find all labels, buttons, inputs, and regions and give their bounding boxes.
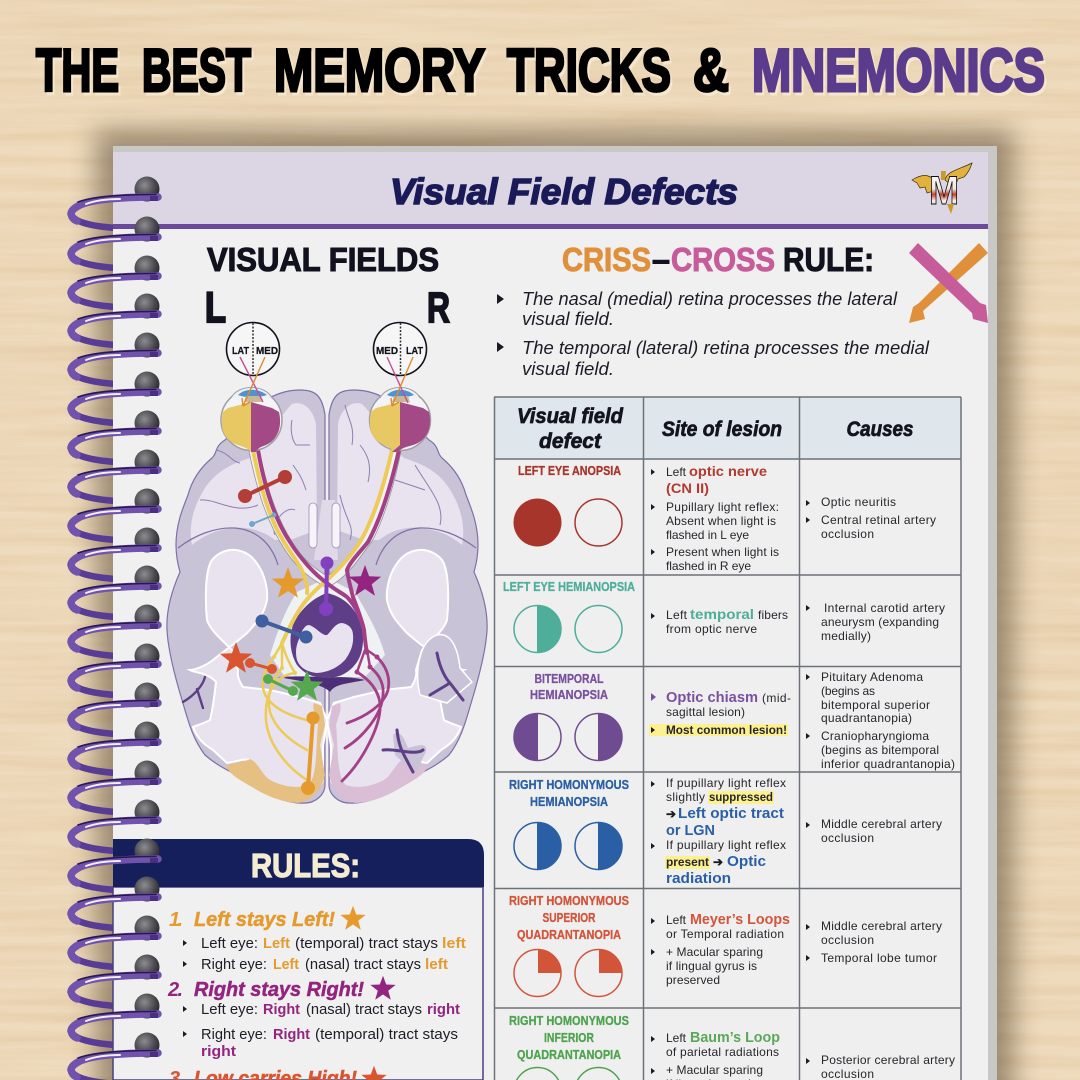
criss-cross heading: CRISS [562,241,651,278]
rule 1: (temporal) tract stays [295,935,438,952]
row: bitemporal hemianopsia: inferior quadrantanopia) [821,757,955,771]
row: right homonymous hemianopsia: If pupillary light reflex [666,776,786,790]
lesion marker: optic nerve [238,470,292,502]
title [36,37,1045,104]
rule 1: Left eye: [201,935,258,952]
logo: winged M: M [929,169,959,213]
table header: Site of lesion [662,418,782,441]
row: right homonymous inferior quadrantanopia [509,1013,955,1080]
eye: left [221,388,282,452]
title: MEMORY [274,37,485,104]
right visual field circle: LAT [406,346,423,357]
row: right homonymous hemianopsia: Middle cerebral artery [821,817,942,831]
row: left eye hemianopsia: from optic nerve [666,622,757,636]
page header band [113,152,988,229]
star: green [291,670,323,701]
rule 2: Right eye: [201,1026,267,1043]
rule 1: Left [263,935,290,952]
row: left eye hemianopsia: medially) [821,629,871,643]
title: BEST [142,37,251,104]
row: bitemporal hemianopsia: HEMIANOPSIA [530,687,609,702]
lesion marker: Baum's loop [264,674,298,696]
rule 2: (nasal) tract stays [306,1001,422,1018]
row: right homonymous hemianopsia: occlusion [821,831,874,845]
rule text: nasal retina: visual field. [522,308,614,329]
rule 2: right [427,1001,460,1018]
rule 1: Right eye: [201,956,267,973]
row: left eye anopsia: occlusion [821,527,874,541]
lesion marker: visual cortex [302,712,319,794]
left hemisphere [167,390,327,803]
row: right homonymous hemianopsia: If pupillary light reflex [666,838,786,852]
row: right homonymous superior quadrantanopia: RIGHT HOMONYMOUS [509,893,629,908]
lesion marker: optic tract [256,615,312,643]
row: bitemporal hemianopsia [514,670,955,771]
table [494,397,961,1080]
row: right homonymous superior quadrantanopia: or Temporal radiation [666,927,784,941]
lesion marker: chiasm [320,557,333,616]
label: L: L [205,284,226,332]
row: right homonymous superior quadrantanopia: Middle cerebral artery [821,919,942,933]
row: bitemporal hemianopsia: quadrantanopia) [821,711,912,725]
row: bitemporal hemianopsia: Optic chiasm [666,690,758,706]
row: left eye anopsia: Present when light is [666,545,779,559]
row: left eye anopsia: flashed in R eye [666,559,751,573]
left visual field circle: MED [256,346,278,357]
criss-cross heading: CROSS [671,241,775,278]
row: right homonymous superior quadrantanopia: Meyer’s Loops [690,912,790,928]
lesion marker: Meyer's loop [246,658,276,674]
row: left eye anopsia: (CN II) [666,480,709,496]
right hemisphere [327,390,487,803]
row: right homonymous superior quadrantanopia: QUADRANTANOPIA [517,927,622,942]
rule text: temporal retina [497,337,930,379]
rule 2: right [201,1043,236,1060]
star: red [220,642,252,673]
row: left eye anopsia [514,463,936,573]
eye: right [370,388,430,452]
rule 1: left [425,956,448,973]
heading: visual fields: VISUAL FIELDS [207,241,439,278]
row: right homonymous inferior quadrantanopia: INFERIOR [544,1030,594,1045]
row: left eye anopsia: optic nerve [689,463,767,479]
rule 1: (nasal) tract stays [305,956,421,973]
row: right homonymous inferior quadrantanopia: QUADRANTANOPIA [517,1047,622,1062]
pale band around tracts [270,578,385,677]
row: left eye hemianopsia [503,579,945,653]
row: right homonymous superior quadrantanopia: Left [666,913,687,927]
row: right homonymous hemianopsia: ➔ [666,807,676,821]
row: right homonymous inferior quadrantanopia: Posterior cerebral artery [821,1053,955,1067]
label: R: R [427,284,450,332]
row: left eye anopsia: Central retinal artery [821,513,936,527]
row: right homonymous hemianopsia [509,776,942,887]
visual field circles [514,498,622,546]
row: right homonymous superior quadrantanopia: occlusion [821,933,874,947]
visual field circles [514,713,622,761]
row: right homonymous superior quadrantanopia: if lingual gyrus is [666,959,757,973]
rule 1: Left [273,956,299,973]
row: left eye hemianopsia: LEFT EYE HEMIANOPSIA [503,579,636,594]
right visual field circle [374,322,426,406]
row: right homonymous hemianopsia: RIGHT HOMONYMOUS [509,777,629,792]
row: bitemporal hemianopsia: (begins as [821,684,875,698]
row: left eye hemianopsia: fibers [758,608,788,622]
star: magenta [349,565,381,596]
visual field circles [514,949,622,996]
row: right homonymous hemianopsia: present [666,855,709,869]
rule 1: left [442,935,466,952]
page heading: Visual Field Defects [390,171,738,212]
row: right homonymous hemianopsia: suppressed [709,790,773,804]
rule 2: Right [263,1001,300,1018]
row: bitemporal hemianopsia: BITEMPORAL [534,671,604,686]
row: right homonymous hemianopsia: Optic [727,854,766,870]
rule 2: Right stays Right! [194,979,364,1001]
rule 1 [169,906,466,973]
right visual field circle: MED [376,346,398,357]
row: right homonymous hemianopsia: slightly [666,790,705,804]
rule 2: 2. [167,979,183,1001]
spiral back coils [71,214,116,1080]
rule 3 [169,1066,387,1080]
criss-cross arrows [909,243,988,323]
rules header [113,839,484,887]
row: right homonymous superior quadrantanopia: + Macular sparing [666,945,763,959]
rule 2: (temporal) tract stays [315,1026,458,1043]
row: right homonymous inferior quadrantanopia: Left [666,1031,687,1045]
row: right homonymous superior quadrantanopia [509,893,942,996]
row: right homonymous inferior quadrantanopia: of parietal radiations [666,1045,779,1059]
criss-cross heading: RULE: [783,241,874,278]
row: right homonymous superior quadrantanopia: SUPERIOR [542,910,596,925]
rule text: temporal retina: visual field. [522,358,614,379]
row: bitemporal hemianopsia: Craniopharyngioma [821,729,929,743]
optic pathways [253,450,399,781]
criss-cross heading: – [652,241,670,278]
row: right homonymous inferior quadrantanopia: Baum’s Loop [690,1030,780,1046]
row: left eye anopsia: LEFT EYE ANOPSIA [518,463,622,478]
rules heading: RULES: [251,847,360,884]
title: THE [36,37,119,104]
row: left eye anopsia: Pupillary light reflex: [666,500,779,514]
left visual field circle: LAT [232,346,249,357]
row: right homonymous superior quadrantanopia: preserved [666,973,720,987]
row: right homonymous inferior quadrantanopia: RIGHT HOMONYMOUS [509,1013,629,1028]
row: left eye hemianopsia: aneurysm (expanding [821,615,939,629]
rules panel [113,839,484,1080]
visual field circles [514,822,622,870]
row: left eye anopsia: Optic neuritis [821,495,896,509]
title: & [693,37,729,104]
row: left eye hemianopsia: Left [666,608,688,622]
row: right homonymous hemianopsia: HEMIANOPSIA [530,794,609,809]
rule 2 [167,976,460,1060]
rule 1: 1. [169,909,183,931]
row: bitemporal hemianopsia: Most common lesion! [666,723,787,737]
title: TRICKS [507,37,671,104]
table grid [494,397,961,1080]
row: right homonymous inferior quadrantanopia: + Macular sparing [666,1063,763,1077]
rule text: temporal retina: The temporal (lateral) retina processes the medial [522,337,930,358]
row: left eye anopsia: flashed in L eye [666,528,749,542]
rule text: nasal retina: The nasal (medial) retina processes the lateral [522,288,898,309]
page shadow [96,130,1014,1080]
row: bitemporal hemianopsia: sagittal lesion) [666,705,745,719]
notebook page [113,146,997,1080]
star: orange [272,567,304,598]
lesion marker: temporal fibers [250,513,276,526]
row: bitemporal hemianopsia: (mid- [762,691,791,705]
rule 2: Right [273,1026,310,1043]
rule text: nasal retina [497,288,898,329]
rules frame [113,887,483,1080]
midbrain [277,593,365,692]
row: left eye hemianopsia: temporal [690,606,754,622]
table header: defect [539,430,602,453]
spiral holes and front coils [71,176,160,1077]
brain diagram [167,388,487,803]
left visual field circle [226,322,280,406]
rule 2: Left eye: [201,1001,258,1018]
row: right homonymous hemianopsia: ➔ [713,855,723,869]
midline structures [309,500,340,560]
rule 1: Left stays Left! [194,909,335,931]
table header: Visual field [517,405,624,428]
visual field circles [514,605,622,653]
criss-cross heading [562,241,874,278]
row: right homonymous hemianopsia: Left optic tract [678,806,784,822]
row: bitemporal hemianopsia: bitemporal superior [821,698,930,712]
row: right homonymous hemianopsia: or LGN [666,823,715,839]
visual field circles [514,1068,622,1080]
row: bitemporal hemianopsia: (begins as bitemporal [821,743,939,757]
row: left eye anopsia: Absent when light is [666,514,776,528]
row: right homonymous superior quadrantanopia: Temporal lobe tumor [821,951,937,965]
row: left eye anopsia: Left [666,465,687,479]
row: bitemporal hemianopsia: Pituitary Adenoma [821,670,923,684]
row: right homonymous hemianopsia: radiation [666,871,731,887]
table header: Causes [846,418,914,441]
table header [517,405,914,453]
row: left eye hemianopsia: Internal carotid artery [824,601,945,615]
logo: winged M [912,163,972,214]
